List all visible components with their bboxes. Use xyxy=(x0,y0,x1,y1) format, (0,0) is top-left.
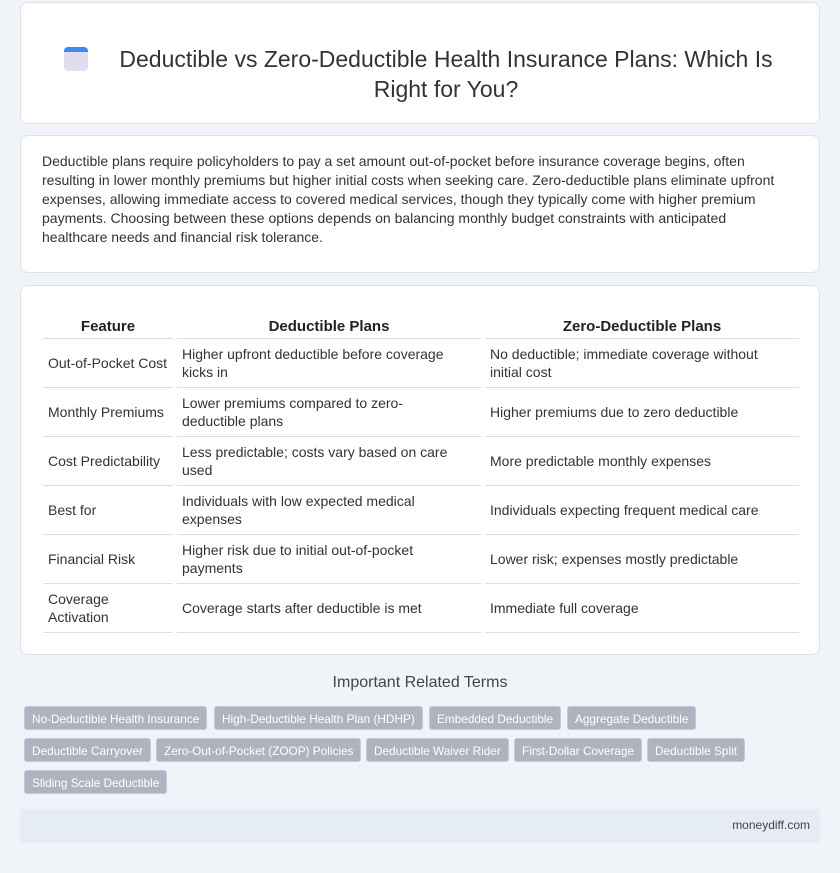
comparison table: Lower premiums compared to zero-deductible plans xyxy=(182,395,403,429)
comparison table: Higher risk due to initial out-of-pocket payments xyxy=(182,542,413,576)
comparison table: Higher premiums due to zero deductible xyxy=(490,404,738,420)
intro text xyxy=(20,135,820,273)
comparison table: Cost Predictability xyxy=(48,453,160,469)
comparison table: Best for xyxy=(48,502,96,518)
comparison table xyxy=(20,285,820,655)
comparison table: No deductible; immediate coverage without initial cost xyxy=(490,346,758,380)
comparison table: Immediate full coverage xyxy=(490,600,639,616)
comparison table: Individuals with low expected medical expenses xyxy=(182,493,415,527)
footer xyxy=(20,809,820,843)
related tags: Deductible Waiver Rider xyxy=(374,744,501,758)
comparison table: Monthly Premiums xyxy=(48,404,164,420)
related tags: High-Deductible Health Plan (HDHP) xyxy=(222,712,415,726)
related tags: Deductible Carryover xyxy=(32,744,143,758)
intro text: Deductible plans require policyholders to pay a set amount out-of-pocket before insurance coverage begins, often resulting in lower monthly premiums but higher initial costs when seeking care. Zero-deductible plans eliminate upfront expenses, allowing immediate access to covered medical services, though they typically come with higher premium payments. Choosing between these options depends on balancing monthly budget constraints with anticipated healthcare needs and financial risk tolerance. xyxy=(42,153,774,245)
comparison table: Out-of-Pocket Cost xyxy=(48,355,167,371)
comparison table: Higher upfront deductible before coverage kicks in xyxy=(182,346,444,380)
comparison table: Coverage Activation xyxy=(48,591,109,625)
footer: moneydiff.com xyxy=(732,818,810,832)
title: Deductible vs Zero-Deductible Health Insurance Plans: Which Is Right for You? xyxy=(119,46,773,102)
header card xyxy=(20,2,820,124)
comparison table: Lower risk; expenses mostly predictable xyxy=(490,551,738,567)
related tags: Sliding Scale Deductible xyxy=(32,776,159,790)
related tags: Aggregate Deductible xyxy=(575,712,688,726)
comparison table: More predictable monthly expenses xyxy=(490,453,711,469)
comparison table: Feature xyxy=(81,318,135,334)
related tags: Embedded Deductible xyxy=(437,712,553,726)
comparison table: Less predictable; costs vary based on care used xyxy=(182,444,447,478)
related tags: First-Dollar Coverage xyxy=(522,744,634,758)
related tags: Deductible Split xyxy=(655,744,737,758)
comparison table: Individuals expecting frequent medical care xyxy=(490,502,758,518)
comparison table: Deductible Plans xyxy=(269,318,389,334)
related tags: No-Deductible Health Insurance xyxy=(32,712,199,726)
comparison table: Zero-Deductible Plans xyxy=(563,318,721,334)
comparison table: Coverage starts after deductible is met xyxy=(182,600,422,616)
related tags: Zero-Out-of-Pocket (ZOOP) Policies xyxy=(164,744,353,758)
related terms heading: Important Related Terms xyxy=(333,674,507,691)
icon: calendar xyxy=(64,47,88,71)
comparison table: Financial Risk xyxy=(48,551,135,567)
